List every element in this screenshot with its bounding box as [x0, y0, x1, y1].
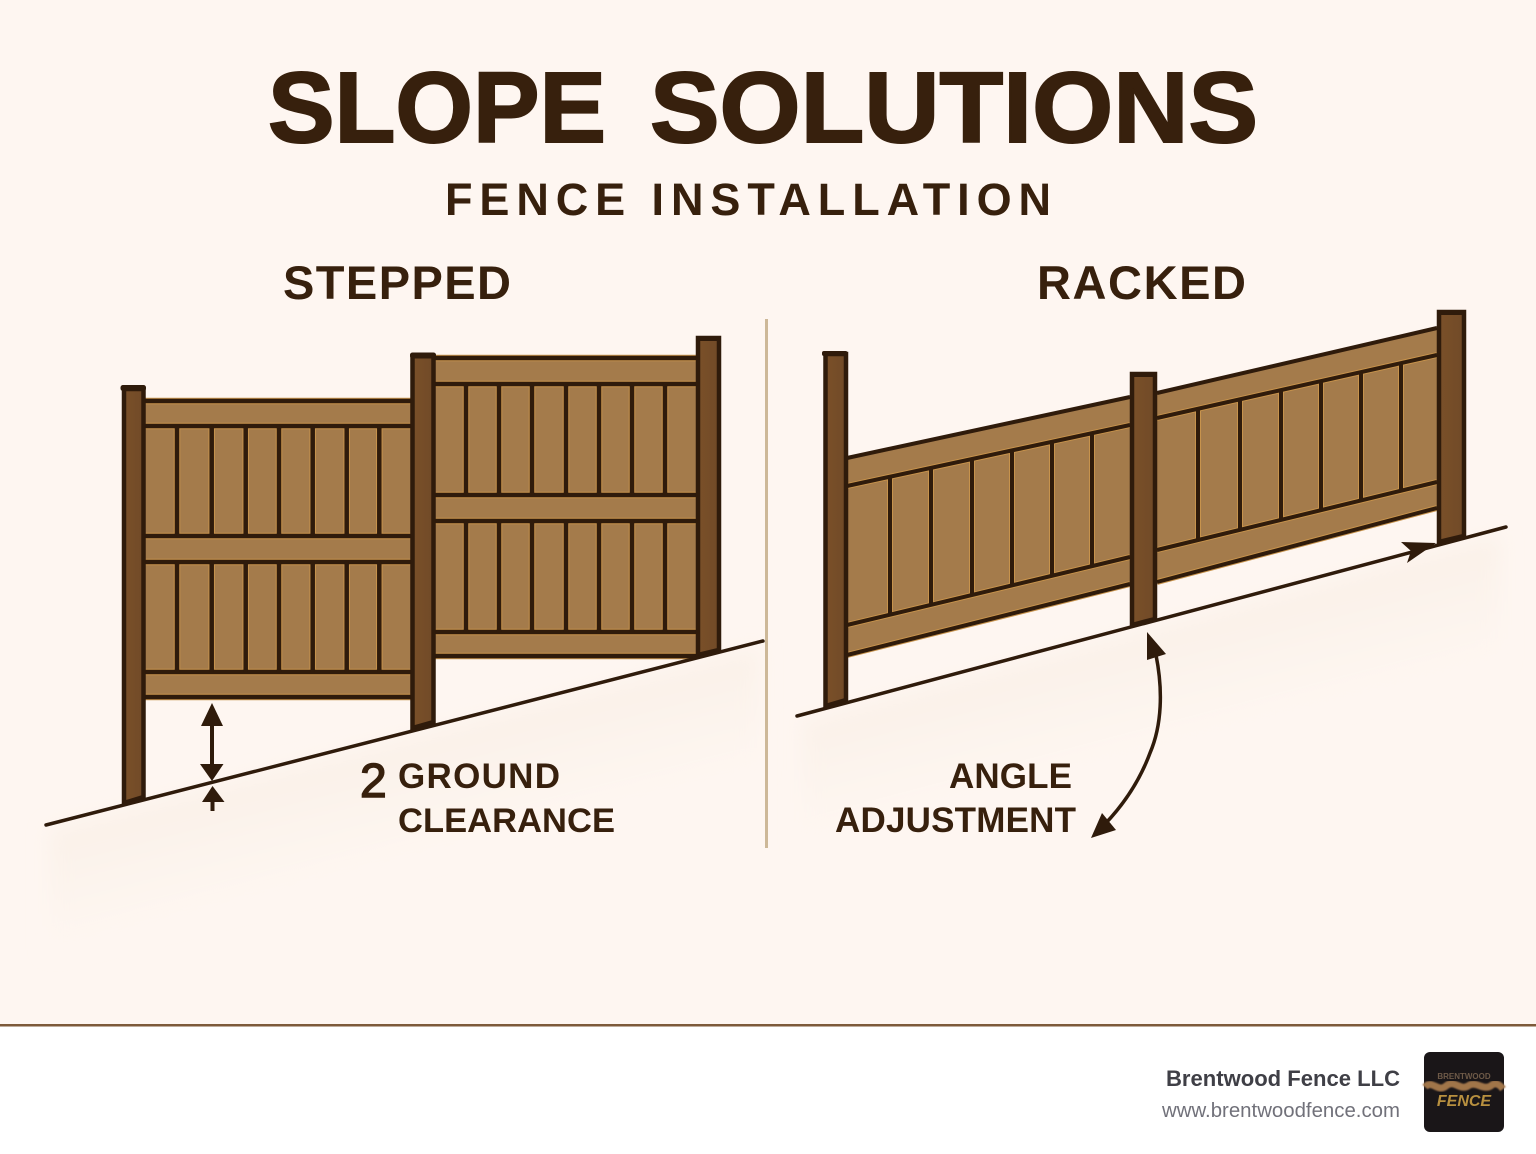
heading: stepped: STEPPED: [283, 256, 511, 309]
panel: racked fence: [822, 310, 1466, 706]
title: SOLUTIONS: [650, 52, 1258, 164]
left fence section: [847, 397, 1130, 655]
heading: racked: RACKED: [1037, 256, 1246, 309]
post: left: [822, 351, 848, 706]
ground line: racked: [797, 527, 1506, 716]
logo: [1424, 1052, 1504, 1132]
label: ground clearance: 2: [360, 755, 387, 808]
upper fence section: [435, 358, 697, 656]
label: ground clearance: [360, 755, 615, 840]
arrow: angle adjustment: [1091, 632, 1166, 838]
post: left: [120, 385, 146, 803]
logo: FENCE: [1437, 1093, 1492, 1110]
footer band: [0, 1024, 1536, 1154]
panel: stepped fence: [120, 336, 721, 803]
post: middle: [410, 352, 436, 728]
label: ground clearance: CLEARANCE: [398, 802, 615, 840]
logo: BRENTWOOD: [1437, 1072, 1491, 1081]
label: angle adjustment: ADJUSTMENT: [835, 801, 1076, 840]
footer company name: Brentwood Fence LLC: [1166, 1066, 1400, 1091]
label: ground clearance: GROUND: [398, 757, 560, 796]
ground shading: stepped side: [50, 648, 759, 950]
footer website: www.brentwoodfence.com: [1161, 1100, 1400, 1122]
title: [268, 52, 1258, 164]
label: angle adjustment: ANGLE: [949, 757, 1072, 796]
post: right: [696, 336, 721, 655]
ground shading: racked side: [802, 536, 1500, 845]
arrow: slope direction: [1401, 542, 1436, 563]
lower fence section: [145, 401, 411, 697]
title: SLOPE: [268, 52, 606, 164]
post: middle: [1130, 372, 1157, 625]
divider: [765, 319, 768, 848]
ground line: stepped: [46, 641, 763, 825]
label: angle adjustment: [835, 757, 1076, 840]
arrow: ground clearance: [200, 703, 224, 811]
post: right: [1438, 310, 1466, 542]
right fence section: [1157, 328, 1437, 582]
subtitle: FENCE INSTALLATION: [445, 174, 1051, 225]
